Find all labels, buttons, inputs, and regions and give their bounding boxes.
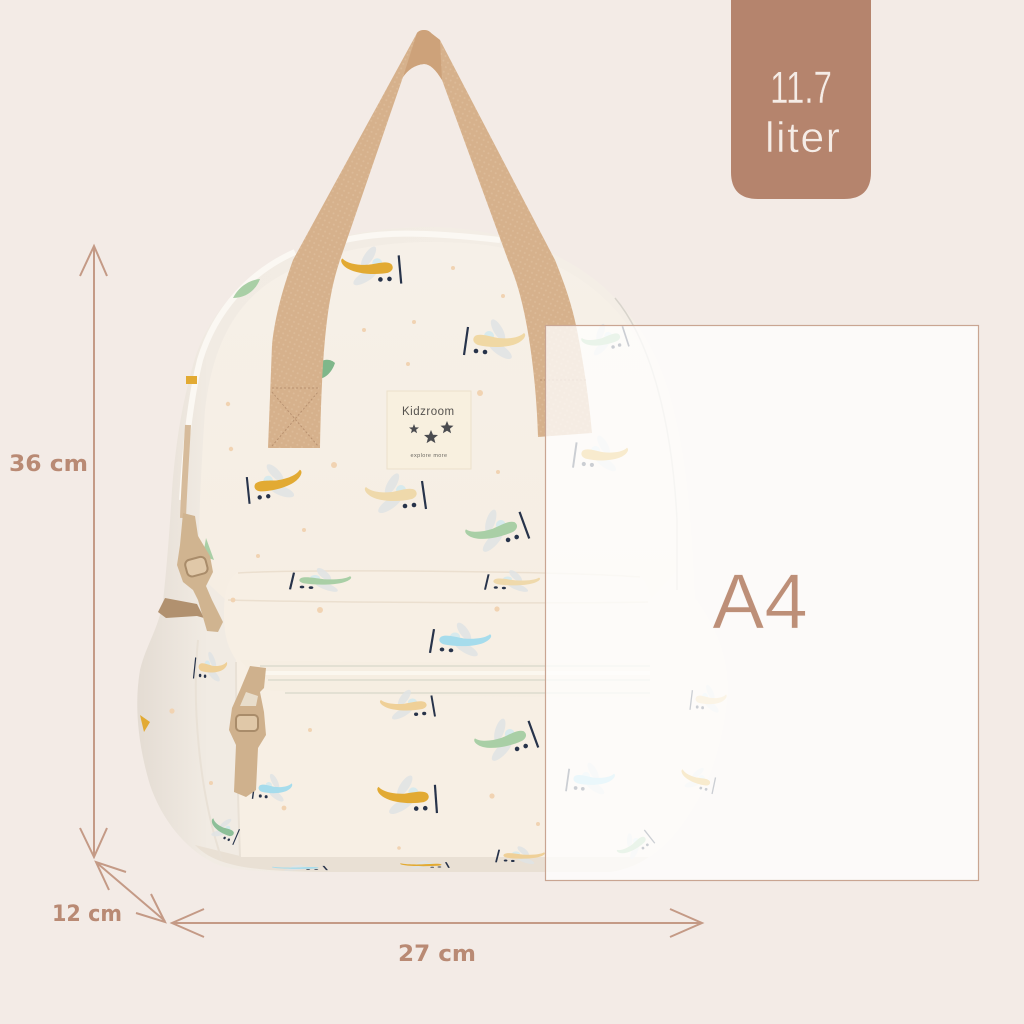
pocket zipper [240,660,650,697]
right piping [615,298,677,590]
label: height: 36 cm [9,452,88,477]
side strap [158,598,204,618]
brand label: Kidzroom [402,406,455,418]
A4 sheet overlay [546,326,978,880]
brand label: explore more [411,453,447,459]
capacity badge [731,0,871,199]
bottom shadow [195,845,650,872]
pocket top seam [228,571,648,603]
side panel seam [196,640,240,860]
backpack [137,30,728,872]
side zipper [183,425,188,518]
front pocket [224,571,667,857]
arrow: height [80,246,107,857]
brand label [387,391,471,469]
label: depth: 12 cm [52,902,122,927]
print: dots [169,266,540,850]
label: width: 27 cm [398,942,476,967]
arrow: depth [96,862,165,922]
print: planes [140,243,727,871]
A4 label: A4 [712,557,808,645]
capacity badge: liter [765,114,840,162]
bag body [137,227,728,872]
top piping [182,234,500,500]
capacity badge: 11.7 [770,62,832,113]
zipper puller: upper [177,513,223,632]
zipper puller: lower [229,666,266,797]
front panel [199,242,678,600]
arrow: width [172,909,702,937]
handles [268,30,592,448]
